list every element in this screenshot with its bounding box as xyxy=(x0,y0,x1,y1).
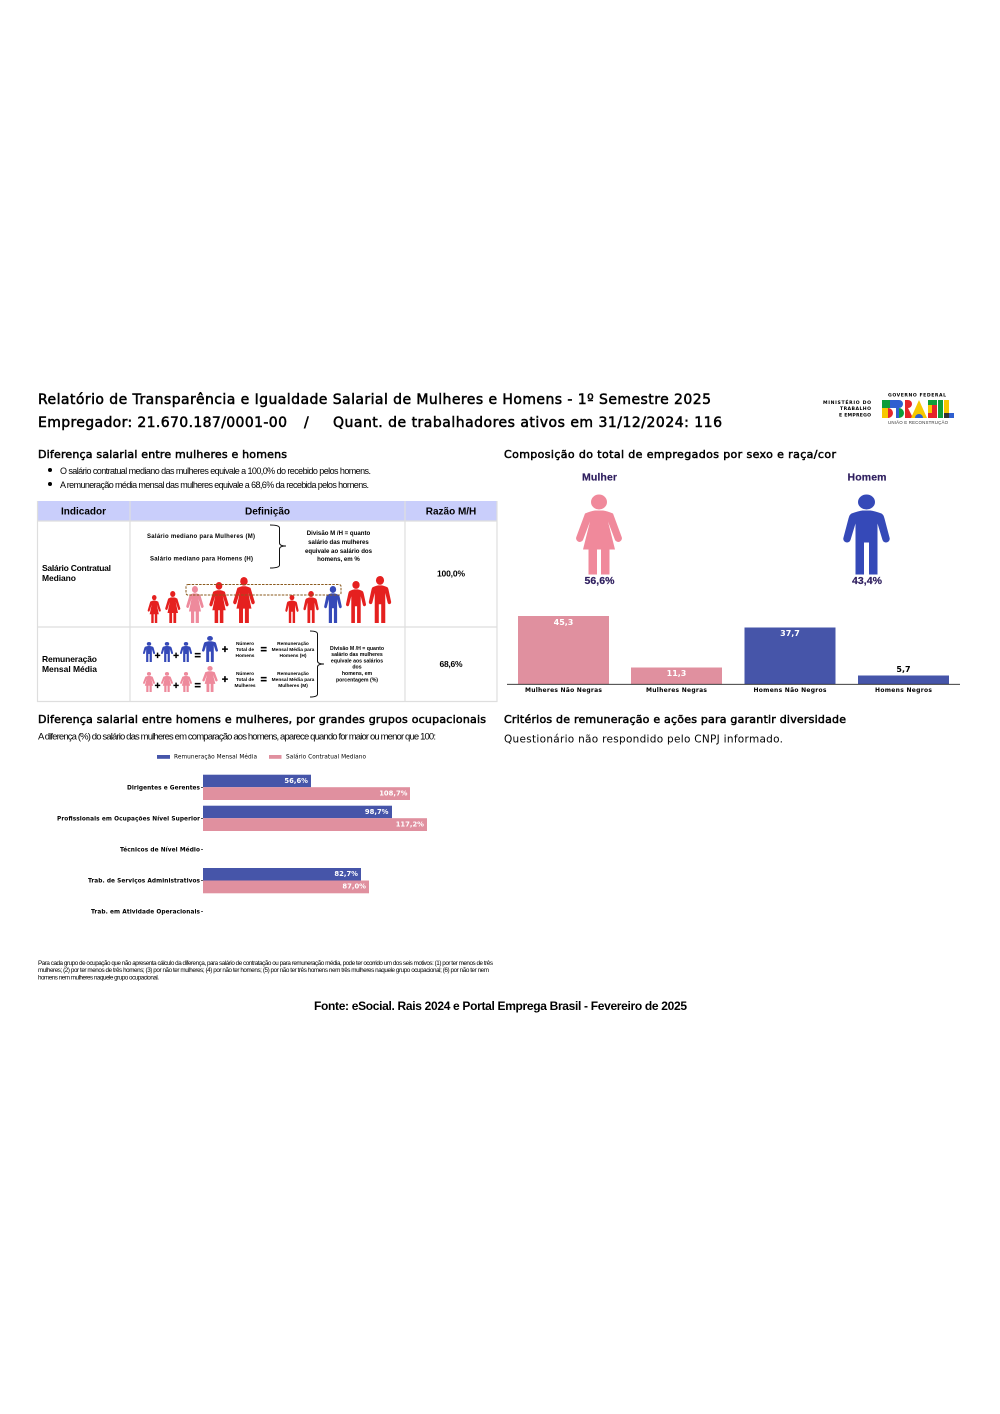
formula: homens: + xyxy=(222,644,228,656)
group: Serviços Administrativos: Trab. de Serviços Administrativos xyxy=(88,879,201,885)
bar: Homens Não Negros: Homens Não Negros xyxy=(754,687,827,694)
formula: homens: + xyxy=(155,651,161,662)
bar: Homens Negros: Homens Negros xyxy=(875,687,932,694)
logo: Ministério do Trabalho e Emprego: E EMPREGO xyxy=(839,412,871,418)
bar: Homens Não Negros xyxy=(744,628,836,694)
group: Profissionais: 117,2% xyxy=(396,820,424,828)
logo: Ministério do Trabalho e Emprego xyxy=(823,398,871,418)
table: indicadores xyxy=(38,501,497,702)
title xyxy=(38,392,722,431)
group: Dirigentes e Gerentes: Dirigentes e Gerentes xyxy=(127,786,201,792)
icon: homem 43,4% xyxy=(843,472,890,587)
row label: remuneração: Remuneração xyxy=(42,654,97,664)
legend: Salário Contratual Mediano xyxy=(286,754,366,761)
definition: salário mediano xyxy=(147,525,373,568)
formula: bracket and division: Divisão M /H = quanto xyxy=(330,646,384,652)
formula: mulheres: = xyxy=(194,680,201,692)
bar chart: composição xyxy=(507,616,960,694)
bullet list: A remuneração média mensal das mulheres equivale a 68,6% da recebida pelos homens. xyxy=(60,480,369,490)
group: Dirigentes e Gerentes: 56,6% xyxy=(284,777,308,785)
title: / xyxy=(304,415,309,431)
footnote: mulheres; (2) por ter menos de três homens; (3) por não ter mulheres; (4) por não ter homens; (5) por não ter três homens nem três mulheres naquele grupo ocupacional; (6) por não ter nem xyxy=(38,967,489,974)
formula: homens: Homens xyxy=(236,653,255,659)
row label: salário contratual: Mediano xyxy=(42,573,76,583)
footnote: Para cada grupo de ocupação que não apresenta cálculo da diferença, para salário de contratação ou para remuneração média, pode ter ocorrido um dos seis motivos: (1) por ter menos de três xyxy=(38,960,493,967)
bar: Homens Não Negros: 37,7 xyxy=(780,629,800,638)
title: Quant. de trabalhadores ativos em 31/12/2024: 116 xyxy=(333,415,722,431)
table header xyxy=(38,501,497,521)
definition: salário mediano: Divisão M /H = quanto xyxy=(307,530,371,537)
definition: salário mediano: Salário mediano para Homens (H) xyxy=(150,556,253,562)
value: 68,6%: 68,6% xyxy=(440,659,463,669)
table header: Definição xyxy=(245,506,290,518)
formula: homens xyxy=(143,636,315,662)
bar: Mulheres Não Negras xyxy=(518,616,609,694)
footnote: homens nem mulheres naquele grupo ocupacional. xyxy=(38,974,159,982)
bullet list xyxy=(48,466,371,490)
row label: remuneração xyxy=(42,654,97,674)
formula: bracket and division: dos xyxy=(352,664,362,670)
legend xyxy=(157,754,366,761)
pictogram: fila de salários homens xyxy=(285,576,391,623)
logo: Ministério do Trabalho e Emprego: TRABALHO xyxy=(840,406,871,412)
formula: homens: = xyxy=(194,650,201,662)
bar: Mulheres Negras xyxy=(631,668,722,694)
row label: salário contratual xyxy=(42,563,111,583)
icon: mulher 56,6%: 56,6% xyxy=(584,575,615,587)
formula: homens: + xyxy=(173,651,179,662)
source: Fonte: eSocial. Rais 2024 e Portal Emprega Brasil - Fevereiro de 2025 xyxy=(314,999,687,1013)
formula: mulheres: Mulheres xyxy=(234,683,256,689)
bar chart: grupos ocupacionais xyxy=(57,775,427,916)
group: Profissionais: 98,7% xyxy=(365,808,389,816)
formula: homens: Homens (H) xyxy=(280,653,307,659)
formula: homens: = xyxy=(260,644,267,656)
formula: mulheres: Mensal Média para xyxy=(272,677,315,683)
formula: mulheres: Total de xyxy=(236,677,254,683)
formula: homens: Remuneração xyxy=(277,641,309,647)
title: Relatório de Transparência e Igualdade Salarial de Mulheres e Homens - 1º Semestre 2025 xyxy=(38,392,711,408)
formula: mulheres: + xyxy=(155,681,161,692)
bar: Homens Negros xyxy=(858,665,949,694)
formula: mulheres: Mulheres (M) xyxy=(278,683,308,689)
definition: salário mediano: salário das mulheres xyxy=(308,539,369,546)
value: 100,0%: 100,0% xyxy=(437,568,465,578)
heading: composição: Composição do total de empregados por sexo e raça/cor xyxy=(504,448,836,461)
heading: critérios: Critérios de remuneração e ações para garantir diversidade xyxy=(504,713,846,726)
logo: Governo Federal Brasil xyxy=(882,392,954,425)
group: Serviços Administrativos: 82,7% xyxy=(334,870,358,878)
table header: Razão M/H xyxy=(426,506,476,518)
group: Profissionais xyxy=(57,806,427,831)
formula: bracket and division: equivale aos salários xyxy=(331,658,383,664)
heading: diferença salarial: Diferença salarial entre mulheres e homens xyxy=(38,448,287,461)
icon: homem 43,4%: Homem xyxy=(848,472,886,484)
formula: bracket and division xyxy=(310,631,384,697)
row label: remuneração: Mensal Média xyxy=(42,664,97,674)
table header: Indicador xyxy=(61,506,106,518)
formula: bracket and division: porcentagem (%) xyxy=(336,678,378,684)
bar: Mulheres Não Negras: Mulheres Não Negras xyxy=(525,687,602,694)
formula: mulheres xyxy=(143,666,315,692)
formula: mulheres: Remuneração xyxy=(277,671,309,677)
logo: Ministério do Trabalho e Emprego: MINISTÉRIO DO xyxy=(823,398,871,406)
bullet list: O salário contratual mediano das mulheres equivale a 100,0% do recebido pelos homens. xyxy=(60,466,371,476)
formula: homens: Mensal Média para xyxy=(272,647,315,653)
logo: Governo Federal Brasil: GOVERNO FEDERAL xyxy=(888,392,946,398)
group: Dirigentes e Gerentes xyxy=(127,775,410,800)
group: Serviços Administrativos xyxy=(88,868,369,893)
formula: homens: Total de xyxy=(236,647,254,653)
icon: homem 43,4%: 43,4% xyxy=(852,575,883,587)
title: Empregador: 21.670.187/0001-00 xyxy=(38,415,287,431)
formula: mulheres: + xyxy=(173,681,179,692)
bar: Mulheres Não Negras: 45,3 xyxy=(554,618,573,627)
definition: salário mediano: homens, em % xyxy=(317,556,360,563)
pictogram: fila de salários mulheres xyxy=(148,577,255,623)
formula: bracket and division: salário das mulheres xyxy=(331,652,383,658)
logo: Governo Federal Brasil: UNIÃO E RECONSTRUÇÃO xyxy=(888,420,949,425)
formula: mulheres: Número xyxy=(236,671,254,677)
formula: homens: Número xyxy=(236,641,254,647)
group: Serviços Administrativos: 87,0% xyxy=(342,883,366,891)
footnote xyxy=(38,960,493,982)
group: Técnicos: Técnicos de Nível Médio xyxy=(120,846,200,854)
dashed highlight: mediana xyxy=(186,584,341,595)
bar: Mulheres Negras: Mulheres Negras xyxy=(646,687,707,694)
subtitle: diferença: A diferença (%) do salário das mulheres em comparação aos homens, aparece quando for maior ou menor que 100: xyxy=(38,732,436,742)
definition: salário mediano: Salário mediano para Mulheres (M) xyxy=(147,534,255,540)
bar: Mulheres Negras: 11,3 xyxy=(667,669,686,678)
row label: salário contratual: Salário Contratual xyxy=(42,563,111,573)
formula: mulheres: + xyxy=(222,674,228,686)
legend: Remuneração Mensal Média xyxy=(174,754,257,761)
formula: bracket and division: homens, em xyxy=(342,671,373,677)
icon: mulher 56,6%: Mulher xyxy=(582,472,617,484)
bar: Homens Negros: 5,7 xyxy=(896,665,911,674)
formula: mulheres: = xyxy=(260,674,267,686)
heading: diferença por grupos: Diferença salarial entre homens e mulheres, por grandes grupos ocupacionais xyxy=(38,713,486,726)
group: Profissionais: Profissionais em Ocupações Nível Superior xyxy=(57,816,200,822)
group: Atividade Operacionais: Trab. em Atividade Operacionais xyxy=(91,910,201,916)
text: questionário: Questionário não respondido pelo CNPJ informado. xyxy=(504,734,783,746)
icon: mulher 56,6% xyxy=(576,472,622,587)
group: Dirigentes e Gerentes: 108,7% xyxy=(379,790,408,798)
definition: salário mediano: equivale ao salário dos xyxy=(305,548,373,555)
